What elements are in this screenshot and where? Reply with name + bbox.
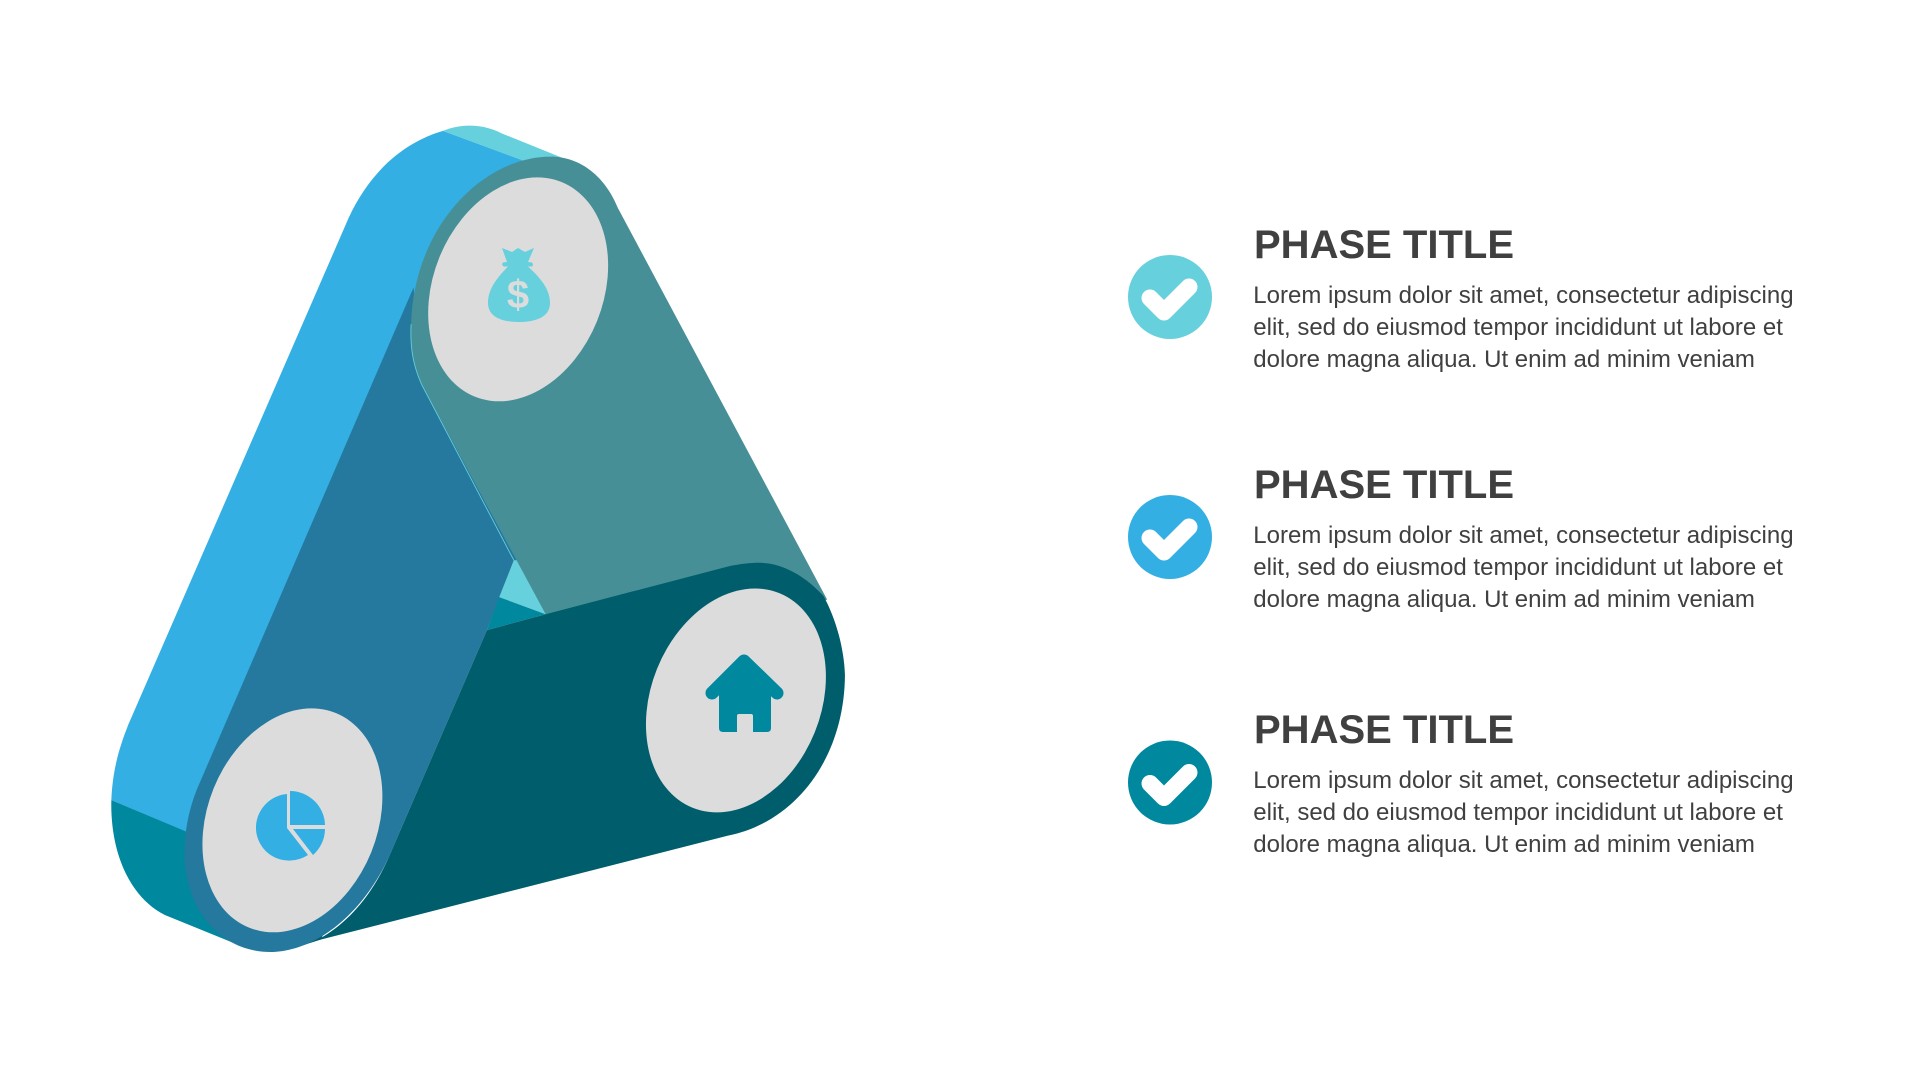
top side face (443, 126, 565, 162)
body text 2 (1253, 522, 1794, 613)
right gray disc (614, 561, 858, 840)
phase item 1 (1128, 223, 1794, 373)
body text 3: elit, sed do eiusmod tempor incididunt ut labore et (1253, 799, 1783, 826)
check badge 1 (1128, 255, 1212, 339)
icon: house (712, 661, 777, 732)
thin highlight along the strip edge (411, 324, 514, 560)
phase item 3 (1128, 708, 1794, 858)
phase item 2 (1128, 463, 1794, 613)
isometric triangle diagram (111, 126, 858, 960)
dark underlay below the lower ring (294, 856, 367, 948)
center small teal triangle (487, 597, 546, 630)
body text 2: Lorem ipsum dolor sit amet, consectetur adipiscing (1253, 522, 1794, 549)
bottom side face (111, 800, 251, 949)
center small light triangle (499, 560, 551, 614)
body text 1: dolore magna aliqua. Ut enim ad minim veniam (1253, 346, 1755, 373)
check badge 2 (1128, 495, 1212, 579)
left outer side face (111, 131, 526, 832)
icon: money bag (488, 248, 550, 322)
heading 1: PHASE TITLE (1254, 223, 1514, 267)
body text 3: Lorem ipsum dolor sit amet, consectetur adipiscing (1253, 767, 1794, 794)
icon: pie chart (256, 791, 325, 861)
upper-right strip with top ring (411, 157, 827, 636)
body text 2: dolore magna aliqua. Ut enim ad minim veniam (1253, 586, 1755, 613)
body text 1: elit, sed do eiusmod tempor incididunt ut labore et (1253, 314, 1783, 341)
heading 2: PHASE TITLE (1254, 463, 1514, 507)
left strip with lower ring (185, 288, 519, 952)
body text 2: elit, sed do eiusmod tempor incididunt ut labore et (1253, 554, 1783, 581)
bottom-left gray disc (170, 681, 415, 960)
body text 1: Lorem ipsum dolor sit amet, consectetur adipiscing (1253, 282, 1794, 309)
body text 1 (1253, 282, 1794, 373)
check badge 3 (1128, 740, 1212, 824)
icon: money bag: $ (507, 273, 529, 317)
heading 3: PHASE TITLE (1254, 708, 1514, 752)
body text 3 (1253, 767, 1794, 858)
body text 3: dolore magna aliqua. Ut enim ad minim veniam (1253, 831, 1755, 858)
top gray disc (396, 150, 640, 429)
lower-right strip with right ring (316, 563, 845, 941)
